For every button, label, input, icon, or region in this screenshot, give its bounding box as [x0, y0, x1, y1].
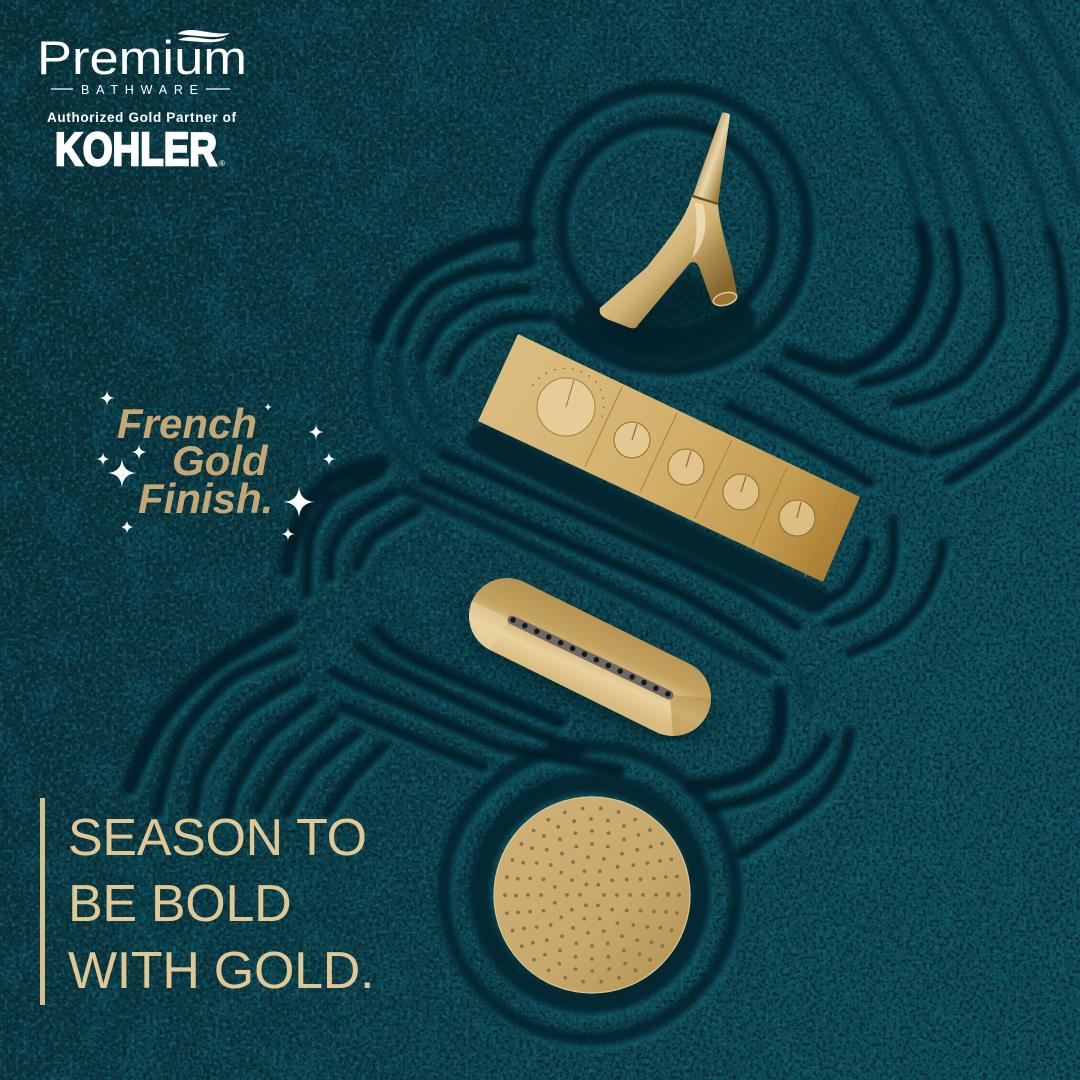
logo wordmark: Premium — [37, 31, 247, 84]
grooves: panel underside shadow — [482, 440, 815, 600]
logo: Kohler: ® — [219, 159, 225, 168]
product: gold body spray pill — [469, 601, 711, 736]
logo wave mark — [177, 30, 230, 42]
knob 3 — [723, 474, 759, 510]
sparkles — [96, 390, 336, 541]
pill plate — [507, 616, 673, 698]
grooves: lower serpentine — [333, 630, 620, 770]
pill right end facet — [670, 695, 711, 736]
logo subline: BATHWARE — [81, 83, 201, 97]
grooves: diagonals below panel — [405, 455, 797, 673]
grooves: faint left turn — [369, 337, 455, 478]
grooves: faint top right lines — [825, 0, 1080, 233]
faucet highlight — [692, 203, 706, 258]
main temperature dial — [533, 368, 604, 436]
logo: Kohler: KOHLER — [55, 123, 217, 175]
grooves: arcs around panel right end — [820, 520, 943, 653]
grooves: arcs around pill right end — [690, 657, 850, 853]
pill left end facet — [469, 601, 510, 650]
headline: WITH GOLD. — [68, 942, 374, 1000]
product: gold basin faucet — [600, 113, 738, 342]
nozzles — [513, 620, 668, 694]
knob 4 — [779, 500, 815, 536]
partner line: Authorized Gold Partner of — [47, 110, 236, 125]
knob 2 — [668, 449, 704, 485]
French Gold Finish label: Gold — [172, 437, 269, 484]
French Gold Finish label: Finish. — [138, 475, 273, 522]
grooves: rings around shower head — [444, 747, 736, 1039]
product: round gold rain shower head — [494, 797, 690, 993]
product: gold thermostatic control panel — [478, 334, 860, 582]
panel plate — [478, 334, 860, 582]
accent bar — [40, 798, 45, 1005]
grooves: rings around faucet — [526, 88, 808, 370]
panel dividers — [585, 387, 843, 577]
headline: BE BOLD — [68, 875, 291, 933]
knob 1 — [614, 422, 650, 458]
shower nozzles — [505, 808, 679, 982]
faucet body — [600, 196, 737, 328]
grooves: mid-left arcs — [287, 463, 417, 593]
grooves: bottom-left arcs — [130, 620, 383, 817]
grooves: upper right arcs — [730, 227, 1080, 483]
French Gold Finish label: French — [117, 400, 257, 447]
nozzle slot — [512, 620, 669, 695]
faucet outlet — [712, 290, 738, 308]
faucet neck — [693, 113, 730, 203]
headline: SEASON TO — [68, 809, 367, 867]
headline — [68, 809, 374, 1000]
French Gold Finish label — [117, 400, 273, 522]
faucet collar — [692, 196, 718, 204]
logo: Premium Bathware — [37, 30, 247, 97]
grooves: upper-left arcs — [377, 233, 547, 373]
